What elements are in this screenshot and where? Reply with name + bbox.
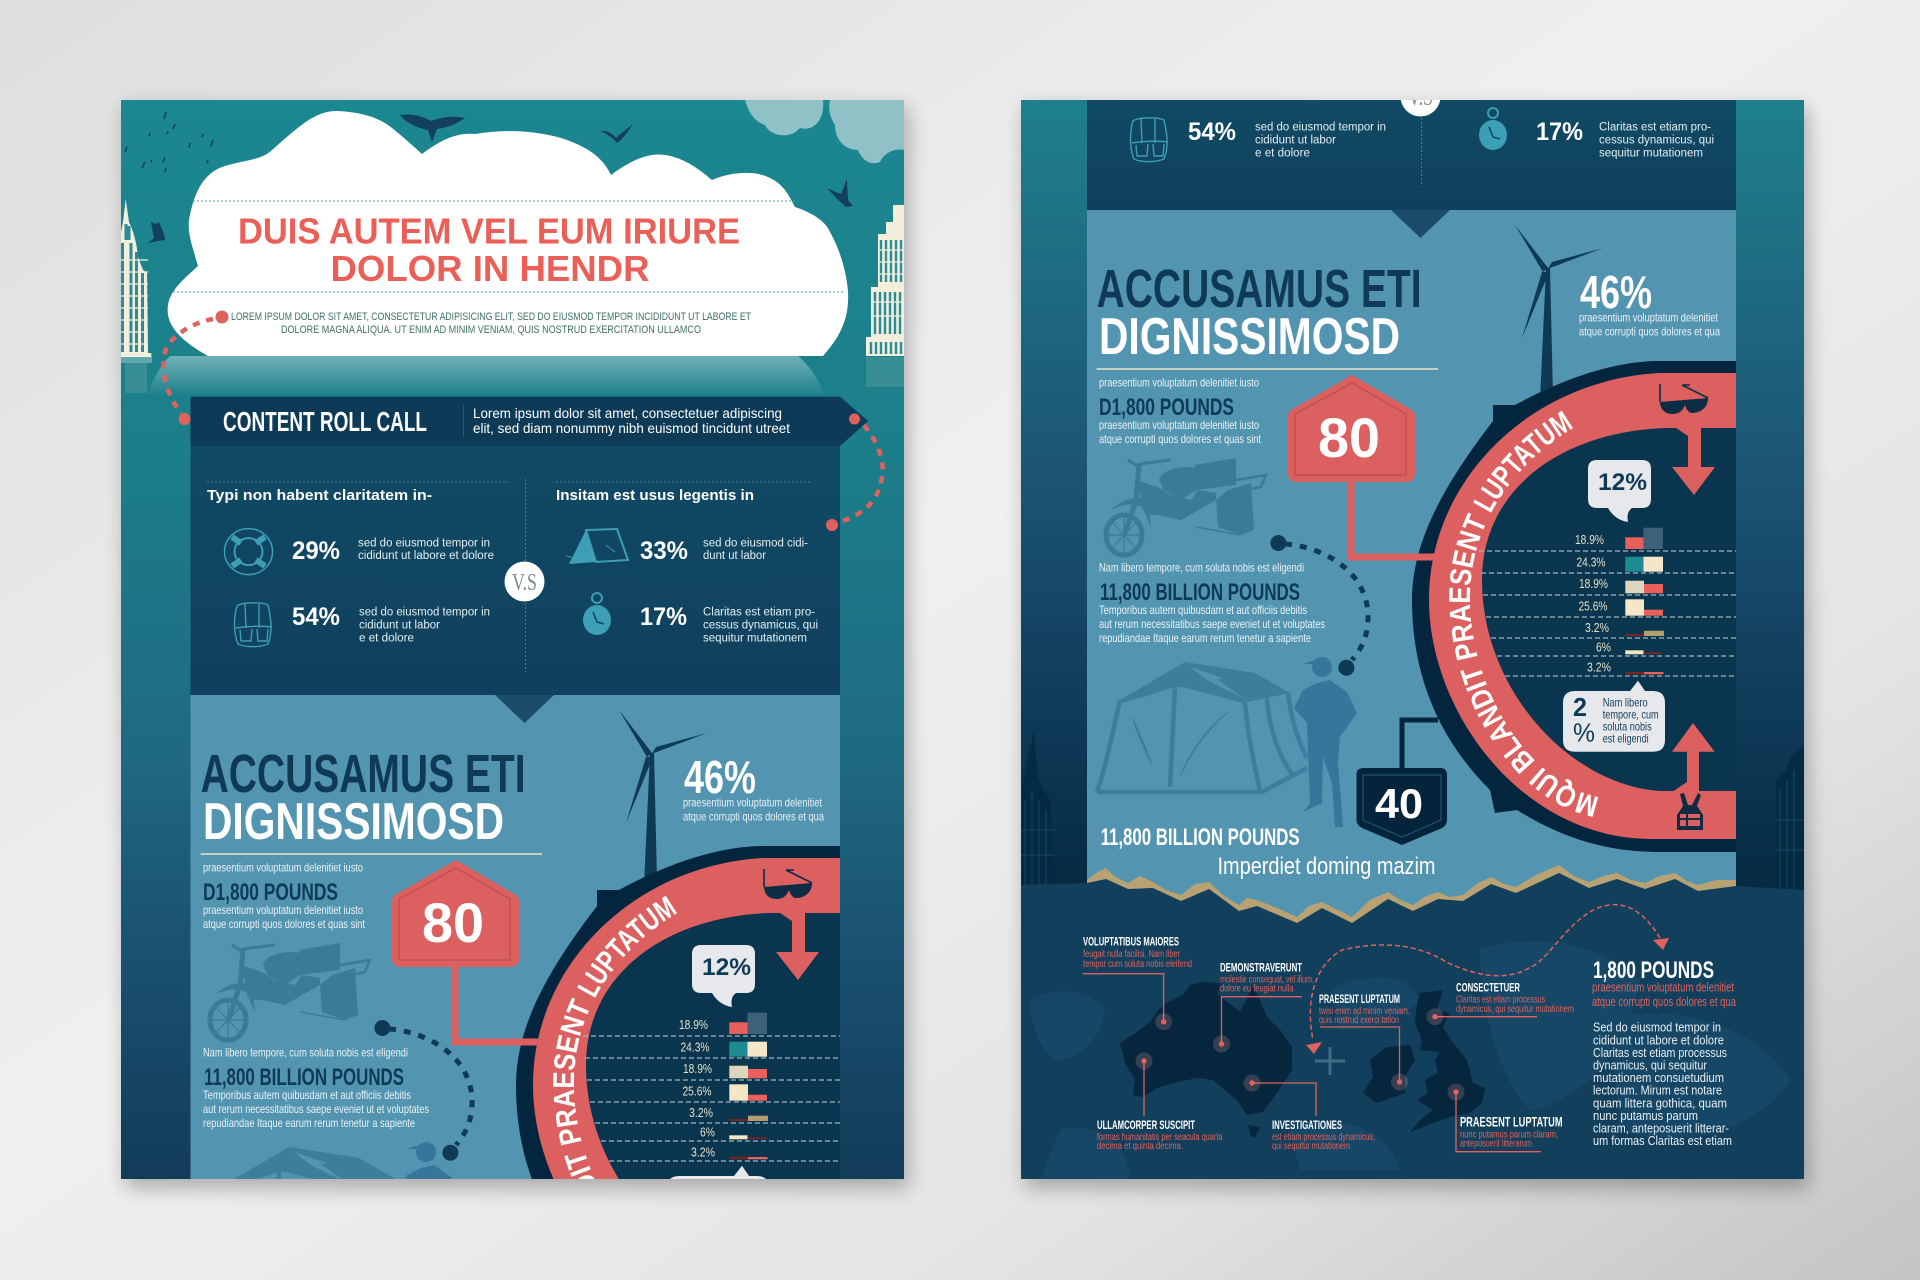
ring lettering: LUPTATUM [1473,410,1573,513]
side column: 1,800 pounds: 1,800 POUNDS [1593,957,1714,984]
stat 33%: sed do eiusmod cidi- [703,538,808,550]
title [240,218,739,282]
icon: sunglasses [1660,384,1708,414]
bar table: 18.9% [1575,533,1604,547]
callout: ullamcorper suscipit: ULLAMCORPER SUSCIPIT [1097,1118,1195,1132]
stat 33% [640,538,808,559]
map: Great Britain and Ireland [1363,990,1485,1132]
stat 46%: 46% [684,751,756,803]
stat 54% [1188,118,1386,160]
callout: praesent luptatum: quis nostrud exerci tation [1319,1015,1399,1026]
callout: consectetuer [1426,981,1574,1025]
block D1,800 pounds: atque corrupti quos dolores et quas sint [203,917,366,931]
group: ring diagram left page [234,710,840,1179]
callout: praesent luptatum: twisi enim ad minim veniam, [1319,1006,1410,1017]
icon: tent [566,529,628,564]
icon: motorcycle silhouette [1106,458,1266,555]
callout: consectetuer: dynamicus, qui sequitur mutationem [1456,1004,1574,1015]
V.S badge [504,562,544,602]
paragraph: Claritas est etiam processus [1593,1046,1727,1060]
stat 33%: 33% [640,537,688,565]
group: ring diagram right page [1095,226,1736,852]
column heading left: Typi non habent claritatem in- [207,487,432,504]
icon: motorcycle silhouette [210,943,370,1040]
stat 46%: praesentium voluptatum delenitiet [683,796,823,810]
heading: CONTENT ROLL CALL [223,406,427,437]
bar table: 6% [1596,641,1611,655]
stat 54%: e et dolore [359,632,414,644]
bubble 2%: est eligendi [1603,731,1649,745]
block D1,800 pounds: atque corrupti quos dolores et quas sint [1099,432,1262,446]
bubble 12%: 12% [1598,469,1647,496]
callout: praesent luptatum lower [1448,1084,1563,1152]
panel: content roll call [190,446,840,695]
bubble 2%: 2 [1573,692,1587,722]
bubble 2% [1563,681,1665,752]
stat 29%: 29% [292,537,340,565]
icon: lifebuoy [224,529,272,575]
stat 17%: sequitur mutationem [703,632,807,644]
ring lettering: MQUI BLANDIT PRAESENT [1449,512,1598,817]
connector 40 [1402,720,1438,768]
skyscraper left [121,199,152,393]
connector 80 [1351,482,1436,557]
paragraph: cididunt ut labore et dolore [1593,1033,1724,1047]
bar table: 3.2% [689,1106,713,1120]
callout: ullamcorper suscipit [1097,1052,1223,1152]
stat 46% [1579,266,1720,339]
stat 17%: sequitur mutationem [1599,148,1703,160]
callout: ullamcorper suscipit: formas humanitatis per seacula quarta [1097,1132,1223,1143]
caption imperdiet: Imperdiet doming mazim [1218,853,1436,880]
block D1,800 pounds: D1,800 POUNDS [203,879,338,906]
icon: person silhouette [398,1142,461,1280]
icon: backpack [234,603,272,647]
block D1,800 pounds: praesentium voluptatum delenitiet iusto [1099,418,1259,432]
stat 54%: cididunt ut labor [1255,134,1336,146]
block D1,800 pounds: praesentium voluptatum delenitiet iusto [203,861,363,875]
bar table: 3.2% [1587,661,1611,675]
title cloud [168,111,848,356]
paragraph: dynamicus, qui sequitur [1593,1058,1707,1072]
dashed route arrow [1306,905,1669,1054]
block 11,800 billion pounds: 11,800 BILLION POUNDS [204,1064,404,1091]
bar table: 18.9% [683,1062,712,1076]
callout: demonstraverunt [1213,961,1314,1052]
header band [190,397,868,446]
bar table: 18.9% [679,1018,708,1032]
callout: ullamcorper suscipit: decima et quinta decima. [1097,1141,1183,1152]
title: DUIS AUTEM VEL EUM IRIURE [238,210,740,252]
title: DOLOR IN HENDR [330,248,650,289]
bar table: 24.3% [680,1041,710,1055]
dark city silhouettes [1021,730,1804,890]
ring lettering: LUPTATUM [577,896,677,998]
callout: voluptatibus maiores: VOLUPTATIBUS MAIORES [1083,935,1179,949]
block 11,800 billion pounds: Nam libero tempore, cum soluta nobis est eligendi [1099,561,1304,575]
stat 33%: dunt ut labor [703,550,766,562]
bar table: 24.3% [1576,556,1606,570]
bubble 12% [1588,460,1651,522]
arrow up [1672,723,1715,792]
map: Australia [1120,982,1292,1138]
bar table: 25.6% [682,1085,712,1099]
stat 54%: e et dolore [1255,148,1310,160]
stat 17%: Claritas est etiam pro- [1599,122,1711,134]
arrow up [776,1208,819,1277]
panel: left page [121,100,904,1179]
bar table: 25.6% [1578,600,1608,614]
icon: stopwatch [583,593,611,635]
icon: bird right [827,179,853,207]
heading: DIGNISSIMOSD [203,793,504,851]
block 11,800 billion pounds: repudiandae Itaque earum rerum tenetur a sapiente [1099,631,1311,645]
heading: DIGNISSIMOSD [1099,308,1400,366]
block D1,800 pounds: D1,800 POUNDS [1099,394,1234,421]
icon: life vest [781,1278,807,1280]
stat 54%: 54% [1188,118,1236,146]
badge 80: 80 [1318,406,1380,469]
icon: backpack [1130,118,1168,162]
panel: right page [1021,100,1804,1179]
header description: elit, sed diam nonummy nibh euismod tincidunt utreet [473,420,790,436]
stat 17%: 17% [640,603,687,631]
paragraph: nunc putamus parum [1593,1109,1698,1123]
ring lettering [553,896,677,1179]
callout: voluptatibus maiores [1083,935,1192,1030]
bubble 2% [667,1166,769,1237]
V.S badge clipped: V.S [1408,85,1433,111]
notch [1391,210,1450,238]
cloud reflection [150,356,822,392]
ring red band [533,858,840,1280]
callout: consectetuer: Claritas est etiam processus [1456,995,1545,1006]
badge 40: 40 [1375,780,1423,827]
callout: investigationes [1244,1074,1375,1152]
torn paper edge tan [1087,865,1736,960]
ring dark [1412,361,1736,852]
callout: voluptatibus maiores: feugait nulla facilisi. Nam liber [1083,949,1180,960]
callout: praesent luptatum: PRAESENT LUPTATUM [1319,992,1400,1006]
ring red band [1429,373,1736,839]
stat 17%: Claritas est etiam pro- [703,606,815,618]
cloud dotted rules [173,201,845,292]
arrow down [776,913,819,980]
stat 54% [292,606,490,642]
block 11,800 billion pounds [203,1046,429,1130]
heading: ACCUSAMUS ETI [201,744,526,804]
icon: tent silhouette [201,1147,411,1277]
notch [495,695,554,723]
stat 17%: cessus dynamicus, qui [703,620,818,632]
badge 80 [392,860,519,967]
bubble 2%: Nam libero [1603,696,1648,710]
paragraph: quam littera gothica, quam [1593,1096,1727,1110]
badge 80 [1288,375,1415,482]
badge 40 [1356,768,1447,845]
block D1,800 pounds [1099,376,1262,446]
header description [473,405,790,436]
stat 17% [1536,118,1714,160]
stat 46%: praesentium voluptatum delenitiet [1579,311,1719,325]
block D1,800 pounds: praesentium voluptatum delenitiet iusto [1099,376,1259,390]
badge 80: 80 [422,891,484,954]
bar table [583,1013,840,1161]
dotted path [374,1020,472,1161]
callout: praesent luptatum lower: PRAESENT LUPTATUM [1460,1114,1563,1130]
bubble 2%: soluta nobis [1603,720,1652,734]
bubble 12%: 12% [702,954,751,981]
header description: Lorem ipsum dolor sit amet, consectetuer adipiscing [473,405,782,421]
block 11,800 billion pounds: Temporibus autem quibusdam et aut officiis debitis [203,1088,411,1102]
red dashed connector right [826,414,883,531]
stat 29%: sed do eiusmod tempor in [358,538,490,550]
block 11,800 billion pounds: repudiandae Itaque earum rerum tenetur a sapiente [203,1116,415,1130]
group: shifted text blocks [1097,259,1720,645]
skyscraper right [866,205,904,387]
icon: person silhouette [1294,657,1357,827]
callout: praesent luptatum lower: nunc putamus parum claram, [1460,1130,1558,1141]
icon: small bird [600,124,633,143]
subtitle [231,311,751,336]
paragraph: um formas Claritas est etiam [1593,1134,1732,1148]
paragraph: mutationem consuetudium [1593,1071,1724,1085]
bubble 12% [692,945,755,1007]
V.S badge: V.S [512,570,537,596]
block 11,800 billion pounds: aut rerum necessitatibus saepe eveniet ut et voluptates [203,1102,429,1116]
heading [1097,259,1422,366]
stat 46%: atque corrupti quos dolores et qua [1579,325,1720,339]
icon: life vest [1677,793,1703,830]
paragraph: Sed do eiusmod tempor in [1593,1021,1721,1035]
side column: 1,800 pounds [1592,957,1737,1148]
icon: sunglasses [764,869,812,899]
heading [202,754,523,840]
stat 54%: 54% [292,603,340,631]
dotted path [1270,535,1368,676]
V.S badge clipped [1400,76,1440,116]
bar table: 3.2% [1585,621,1609,635]
arrow down [1672,428,1715,495]
callout: consectetuer: CONSECTETUER [1456,981,1520,995]
stat 54%: cididunt ut labor [359,620,440,632]
icon: tent silhouette [1097,662,1307,792]
column heading right: Insitam est usus legentis in [556,487,754,504]
ring dark [516,846,840,1280]
bubble 2%: % [1573,718,1595,748]
red dashed connector left [163,310,228,425]
callout: investigationes: est etiam processus dynamicus, [1272,1132,1375,1143]
callout: demonstraverunt: molestie consequat, vel illum, [1220,975,1314,986]
stat 29%: cididunt ut labore et dolore [358,550,494,562]
stat 17%: 17% [1536,118,1583,146]
heading: ACCUSAMUS ETI [1097,259,1422,319]
bar table [1479,528,1736,676]
panel: dark top continuation [1087,100,1736,210]
subtitle: LOREM IPSUM DOLOR SIT AMET, CONSECTETUR ADIPISICING ELIT, SED DO EIUSMOD TEMPOR INCIDIDUNT UT LABORE ET [231,311,751,323]
pale clouds top right [745,100,904,163]
block 11,800 billion pounds: aut rerum necessitatibus saepe eveniet ut et voluptates [1099,617,1325,631]
callout: investigationes: INVESTIGATIONES [1272,1118,1342,1132]
icon: eagle [400,115,465,142]
subtitle: DOLORE MAGNA ALIQUA. UT ENIM AD MINIM VENIAM, QUIS NOSTRUD EXERCITATION ULLAMCO [281,324,701,336]
block 11,800 billion pounds [1099,561,1325,645]
callout: praesent luptatum lower: anteposuerit litterarum [1460,1139,1532,1150]
callout: voluptatibus maiores: tempor cum soluta nobis eleifend [1083,959,1192,970]
stat 54%: sed do eiusmod tempor in [359,606,490,618]
callout: demonstraverunt: DEMONSTRAVERUNT [1220,961,1302,975]
icon: bird left [148,222,165,243]
panel: accusamus light section [1087,210,1736,920]
panel: accusamus light section [190,695,840,1180]
side column: 1,800 pounds: atque corrupti quos dolores et qua [1592,994,1737,1009]
plus sign [1315,1047,1345,1075]
caption 11,800 white: 11,800 BILLION POUNDS [1101,824,1300,851]
block 11,800 billion pounds: 11,800 BILLION POUNDS [1100,579,1300,606]
stat 46%: 46% [1580,266,1652,318]
bar table: 6% [700,1126,715,1140]
paragraph: claram, anteposuerit litterar- [1593,1122,1729,1136]
flock of birds [125,112,213,172]
icon: stopwatch [1479,108,1507,150]
stat 17% [641,606,818,644]
block D1,800 pounds: praesentium voluptatum delenitiet iusto [203,903,363,917]
stat 46% [683,760,824,823]
block 11,800 billion pounds: Nam libero tempore, cum soluta nobis est eligendi [203,1046,408,1060]
icon: wind turbine [619,710,707,885]
block 11,800 billion pounds: Temporibus autem quibusdam et aut officiis debitis [1099,603,1307,617]
paragraph: lectorum. Mirum est notare [1593,1084,1722,1098]
stat 46%: atque corrupti quos dolores et qua [683,810,824,824]
stat 17%: cessus dynamicus, qui [1599,134,1714,146]
bar table: 18.9% [1579,577,1608,591]
stat 29% [292,538,494,559]
icon: wind turbine [1515,225,1603,400]
bubble 2%: tempore, cum [1603,708,1659,722]
connector 80 [455,967,540,1042]
callout: demonstraverunt: dolore eu feugiat nulla [1220,984,1294,995]
panel: map section [1021,873,1804,1180]
callout: investigationes: qui sequitur mutationem [1272,1141,1350,1152]
block D1,800 pounds [203,861,366,931]
callout: praesent luptatum [1319,992,1410,1090]
faint world map [1030,941,1790,1180]
paragraph [1593,1021,1732,1148]
side column: 1,800 pounds: praesentium voluptatum delenitiet [1592,980,1734,995]
stat 54%: sed do eiusmod tempor in [1255,122,1386,134]
bar table: 3.2% [691,1146,715,1160]
